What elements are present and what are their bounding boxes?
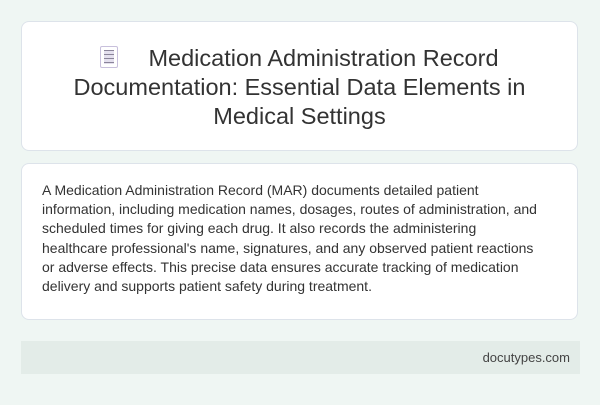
- title: Medication Administration Record Documentation: Essential Data Elements in Medical Settings: [74, 45, 525, 129]
- description text: A Medication Administration Record (MAR) documents detailed patient information, including medication names, dosages, routes of administration, and scheduled times for giving each drug. It also records the administering healthcare professional's name, signatures, and any observed patient reactions or adverse effects. This precise data ensures accurate tracking of medication delivery and supports patient safety during treatment.: [42, 182, 537, 294]
- footer source: docutypes.com: [483, 350, 570, 365]
- footer: [21, 341, 580, 374]
- description card: [21, 163, 578, 320]
- title card: [21, 21, 578, 151]
- icon: document scroll: [100, 46, 118, 68]
